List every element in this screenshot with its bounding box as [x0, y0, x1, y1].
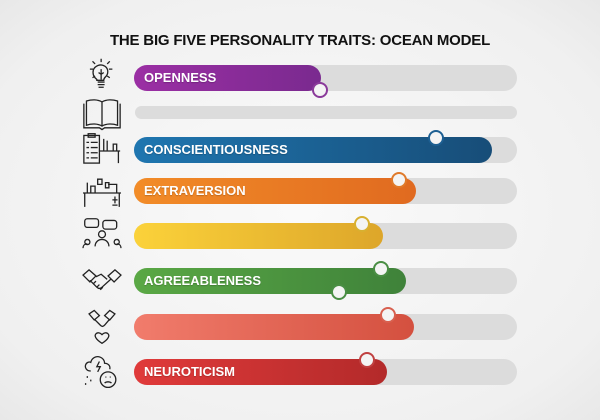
panel: openness [134, 65, 517, 91]
icon: lightbulb [90, 58, 112, 88]
icon: book [83, 99, 121, 130]
title: THE BIG FIVE PERSONALITY TRAITS: OCEAN MODEL [110, 32, 490, 49]
icon: handshake [82, 269, 122, 290]
icon: office desk [83, 178, 121, 207]
knob agreeableness lower [331, 284, 347, 300]
knob conscientiousness [428, 130, 444, 146]
track: book row [135, 106, 517, 119]
icon: clipboard desk [83, 133, 120, 164]
knob openness [312, 82, 328, 98]
panel: neuroticism: NEUROTICISM [144, 364, 235, 379]
panel: extraversion: EXTRAVERSION [144, 183, 246, 198]
knob extraversion [391, 172, 407, 188]
knob salmon [380, 307, 396, 323]
knob yellow [354, 216, 370, 232]
icon: people talking [82, 218, 122, 248]
panel: neuroticism [134, 359, 517, 385]
panel: conscientiousness: CONSCIENTIOUSNESS [144, 142, 288, 157]
panel: openness: OPENNESS [144, 70, 216, 85]
panel: yellow bar [134, 223, 517, 249]
icon: handshake heart [88, 310, 116, 344]
panel: conscientiousness [134, 137, 517, 163]
knob agreeableness upper [373, 261, 389, 277]
icon: storm cloud sad face [84, 356, 116, 388]
panel: agreeableness: AGREEABLENESS [144, 273, 261, 288]
panel: extraversion [134, 178, 517, 204]
knob neuroticism [359, 352, 375, 368]
panel: agreeableness [134, 268, 517, 294]
panel: salmon bar [134, 314, 517, 340]
